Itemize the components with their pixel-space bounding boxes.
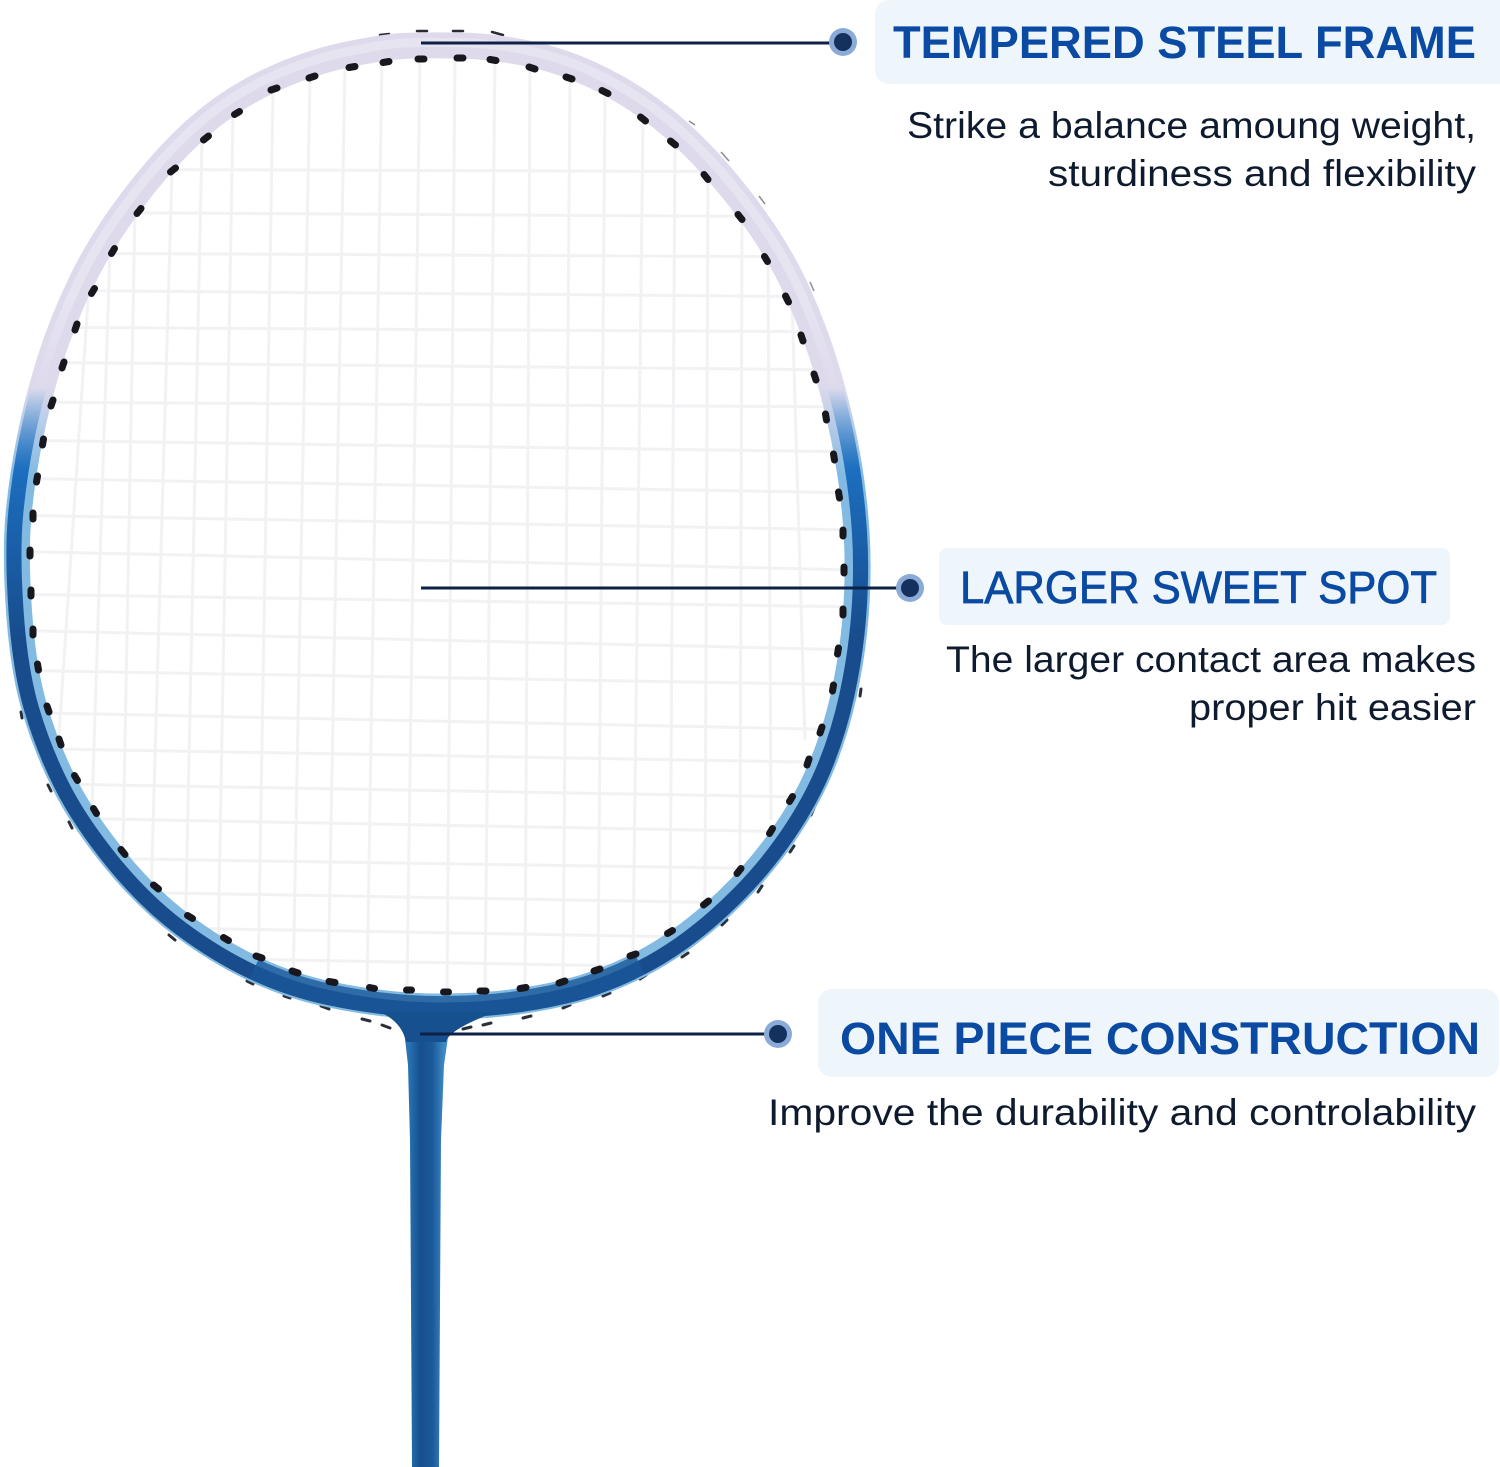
description [946,639,1476,728]
heading: LARGER SWEET SPOT [960,562,1437,613]
frame dark band [14,42,861,1010]
marker dot [764,1020,792,1048]
grommets [30,58,844,992]
connector line [420,1032,778,1036]
heading: TEMPERED STEEL FRAME [893,17,1476,68]
top rear slivers [380,31,503,35]
description [907,105,1477,194]
heading pill [875,0,1500,84]
frame highlight [14,42,859,612]
throat joint [380,1012,495,1042]
description: proper hit easier [1189,687,1476,728]
strings [0,55,860,990]
connector line [421,586,910,590]
shaft [404,1030,449,1467]
callout: larger sweet spot [421,548,1476,728]
description: The larger contact area makes [946,639,1476,680]
callout: one piece construction [420,989,1499,1133]
description: Strike a balance amoung weight, [907,105,1476,146]
frame base [17,45,858,1007]
marker dot [896,574,924,602]
bottom arc fill [254,964,640,1007]
description: sturdiness and flexibility [1048,153,1477,194]
shoulder slivers [689,121,814,291]
heading: ONE PIECE CONSTRUCTION [840,1013,1480,1064]
connector line [421,42,843,44]
rear grommets [21,689,861,1029]
racket [0,31,861,1467]
racket frame [14,42,861,1010]
heading pill [939,548,1450,625]
heading pill [818,989,1499,1077]
callout: tempered steel frame [421,0,1500,194]
marker dot [829,28,857,56]
description: Improve the durability and controlability [768,1092,1477,1133]
